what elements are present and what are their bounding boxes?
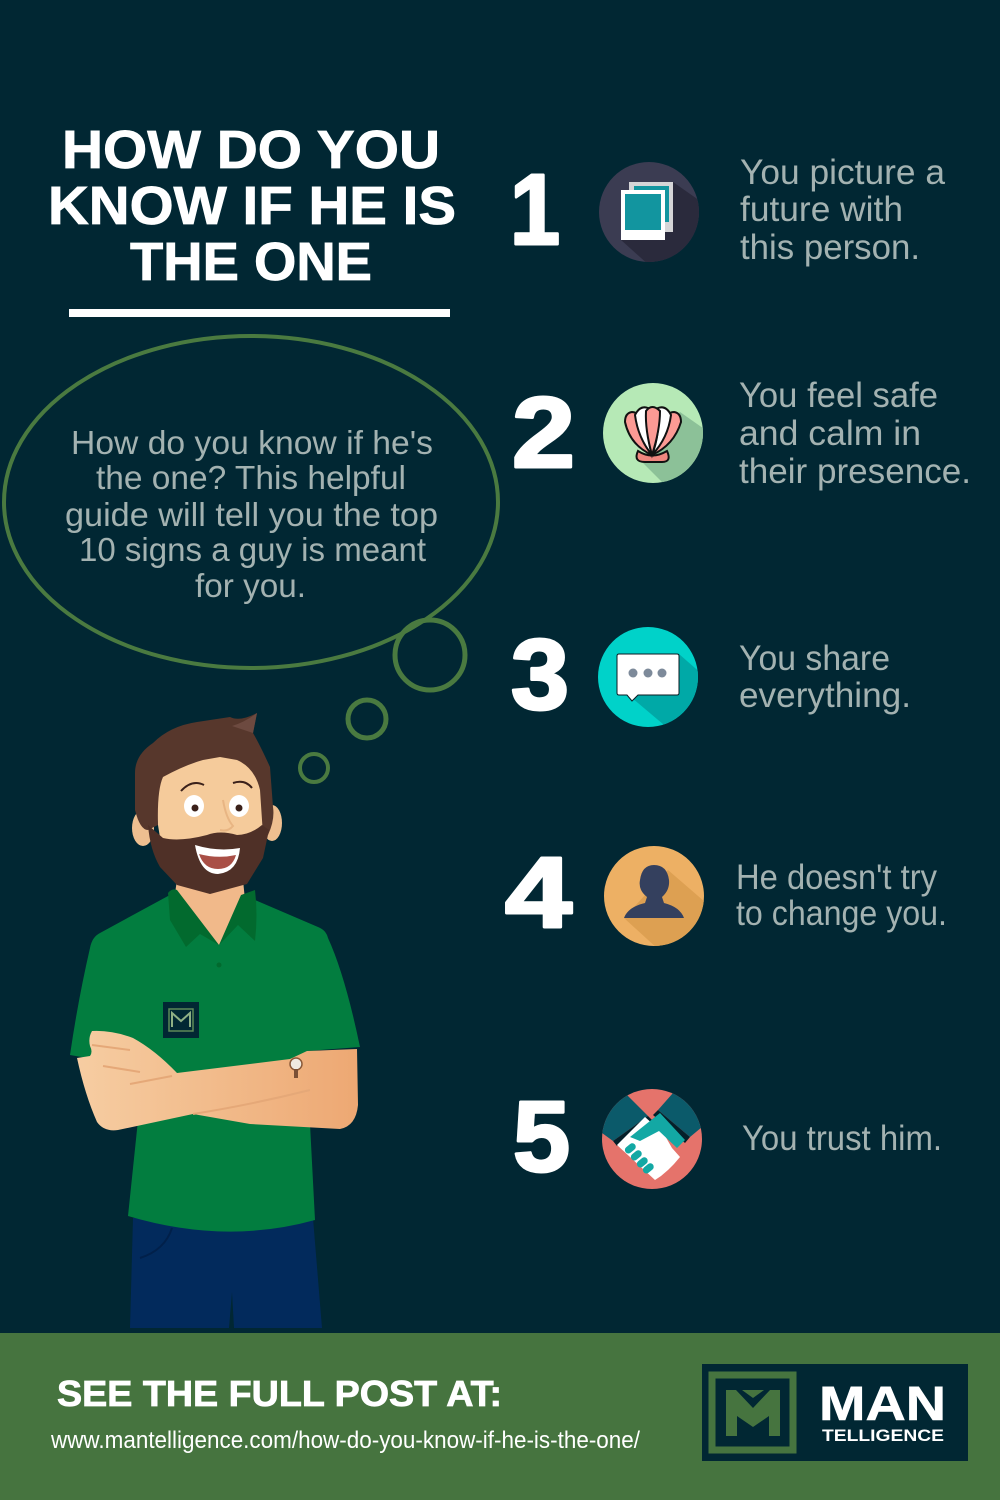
thought bubble text bbox=[65, 424, 438, 604]
item 1 bbox=[514, 158, 946, 266]
title: HOW DO YOU bbox=[62, 120, 440, 180]
item 2: and calm in bbox=[739, 414, 921, 453]
item 2: their presence. bbox=[739, 452, 971, 491]
item 4: 4 bbox=[505, 837, 572, 949]
item 2: 2 bbox=[512, 377, 575, 489]
thought bubble text: How do you know if he's bbox=[71, 424, 433, 461]
icon: person bbox=[604, 846, 704, 946]
item 3: 3 bbox=[511, 619, 569, 731]
footer band bbox=[0, 1333, 1000, 1500]
character: bearded man with crossed arms bbox=[70, 713, 360, 1328]
item 5: You trust him. bbox=[742, 1119, 942, 1158]
item 5 bbox=[514, 1089, 939, 1189]
item 1: this person. bbox=[740, 228, 920, 267]
shirt badge bbox=[163, 1002, 199, 1038]
icon: shell bbox=[603, 383, 703, 483]
thought bubble text: 10 signs a guy is meant bbox=[79, 531, 426, 568]
call to action: SEE THE FULL POST AT: bbox=[57, 1373, 502, 1414]
icon: chat bubble bbox=[598, 627, 698, 727]
thought bubble bbox=[4, 336, 498, 782]
logo: TELLIGENCE bbox=[822, 1426, 944, 1445]
thought bubble text: guide will tell you the top bbox=[65, 496, 438, 533]
item 3: everything. bbox=[739, 676, 911, 715]
item 1: You picture a bbox=[740, 153, 946, 192]
icon: handshake bbox=[602, 1089, 702, 1189]
item 3 bbox=[512, 627, 908, 727]
item 4 bbox=[505, 846, 944, 946]
logo bbox=[702, 1364, 968, 1461]
item 4: He doesn't try bbox=[736, 858, 937, 897]
title bbox=[48, 120, 456, 292]
title: THE ONE bbox=[130, 232, 372, 292]
title underline bbox=[69, 309, 450, 317]
icon: photos bbox=[599, 162, 699, 262]
item 3: You share bbox=[739, 639, 890, 678]
item 1: 1 bbox=[510, 154, 560, 266]
item 1: future with bbox=[740, 190, 903, 229]
logo: MAN bbox=[819, 1378, 946, 1431]
item 4: to change you. bbox=[736, 894, 947, 933]
url: www.mantelligence.com/how-do-you-know-if-he-is-the-one/ bbox=[50, 1427, 640, 1454]
item 2 bbox=[514, 382, 968, 490]
thought bubble text: the one? This helpful bbox=[96, 459, 406, 496]
item 2: You feel safe bbox=[739, 376, 938, 415]
title: KNOW IF HE IS bbox=[48, 176, 456, 236]
thought bubble text: for you. bbox=[195, 567, 306, 604]
item 5: 5 bbox=[513, 1081, 570, 1193]
